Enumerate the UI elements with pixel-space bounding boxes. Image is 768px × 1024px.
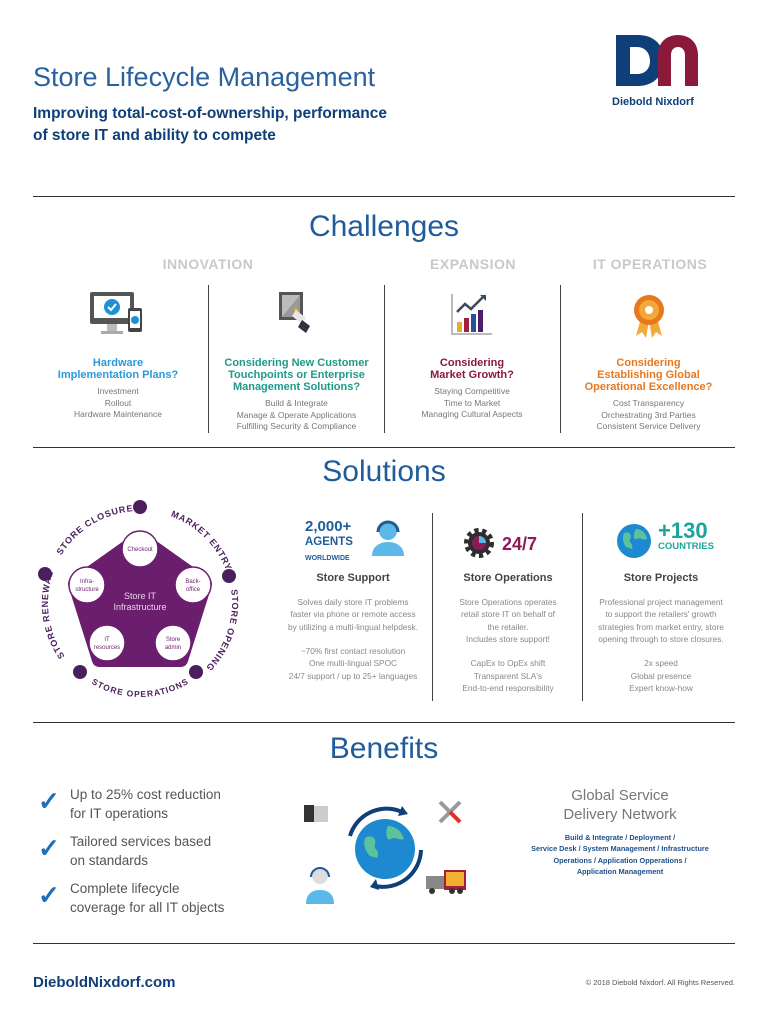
service network illustration bbox=[304, 800, 466, 904]
subtitle bbox=[33, 105, 387, 144]
category labels bbox=[163, 256, 707, 272]
benefits list: Tailored services based bbox=[70, 834, 211, 849]
challenge: market growth: Staying Competitive bbox=[434, 386, 510, 396]
challenge: market growth: Considering bbox=[440, 357, 504, 369]
lifecycle diagram: resources bbox=[94, 645, 120, 651]
challenge: touchpoints: Build & Integrate bbox=[265, 398, 328, 408]
icon: globe +130 bbox=[617, 518, 714, 558]
challenge: market growth: Managing Cultural Aspects bbox=[421, 409, 523, 419]
challenge: hardware: Rollout bbox=[105, 398, 131, 408]
logo: Diebold Nixdorf bbox=[612, 96, 694, 108]
title: Store Lifecycle Management bbox=[33, 62, 375, 92]
global service delivery network text: Delivery Network bbox=[563, 806, 677, 823]
lifecycle diagram: Store IT bbox=[124, 591, 157, 601]
icon: touch screen bbox=[279, 292, 310, 333]
solution: store operations: Store Operations operates bbox=[459, 597, 557, 607]
challenge: operational excellence: Establishing Global bbox=[597, 369, 700, 381]
benefits list: Up to 25% cost reduction bbox=[70, 787, 221, 802]
solution: store operations: Store Operations bbox=[463, 572, 553, 584]
challenge: hardware: Investment bbox=[97, 386, 139, 396]
icon: globe +130: +130 bbox=[658, 518, 708, 543]
solution: store projects: Store Projects bbox=[624, 572, 698, 584]
challenge: touchpoints: Management Solutions? bbox=[233, 381, 360, 393]
icon: agents bbox=[305, 518, 404, 562]
challenge: touchpoints: Touchpoints or Enterprise bbox=[228, 369, 365, 381]
heading: challenges: Challenges bbox=[309, 210, 459, 243]
solution: store operations: End-to-end responsibility bbox=[462, 683, 554, 693]
lifecycle diagram: STORE OPERATIONS bbox=[92, 679, 188, 697]
solution: store projects: Expert know-how bbox=[629, 683, 693, 693]
solution: store projects: 2x speed bbox=[644, 658, 678, 668]
challenge: touchpoints: Manage & Operate Applications bbox=[237, 410, 356, 420]
challenge: hardware: Hardware bbox=[93, 357, 143, 369]
solution: store support: by utilizing a multi-lingual helpdesk. bbox=[288, 622, 418, 632]
benefits list: ✓ bbox=[38, 833, 60, 863]
global service delivery network text: Application Management bbox=[577, 867, 663, 876]
lifecycle diagram: MARKET ENTRY bbox=[171, 510, 232, 568]
lifecycle diagram: Infra- bbox=[80, 579, 94, 585]
solution: store support: Store Support bbox=[316, 572, 390, 584]
solution: store operations bbox=[459, 528, 557, 693]
solution: store projects bbox=[598, 518, 724, 693]
lifecycle diagram: admin bbox=[165, 645, 181, 651]
icon: gear 24/7 bbox=[464, 528, 537, 558]
lifecycle diagram: STORE CLOSURE bbox=[56, 505, 132, 554]
lifecycle diagram: Infrastructure bbox=[113, 602, 167, 612]
challenge: hardware bbox=[58, 292, 178, 419]
challenge: hardware: Implementation Plans? bbox=[58, 369, 178, 381]
benefits list: ✓ bbox=[38, 880, 60, 910]
lifecycle diagram: office bbox=[186, 587, 201, 593]
solution: store projects: opening through to store closures. bbox=[598, 634, 724, 644]
icon: globe +130: COUNTRIES bbox=[658, 541, 714, 552]
benefits list bbox=[38, 786, 224, 915]
solution: store operations: the retailer. bbox=[487, 622, 529, 632]
lifecycle diagram: Back- bbox=[185, 579, 201, 585]
solution: store projects: strategies from market entry, store bbox=[598, 622, 724, 632]
challenge: touchpoints: Fulfilling Security & Compliance bbox=[237, 421, 356, 431]
global service delivery network text bbox=[531, 787, 709, 876]
subtitle: Improving total-cost-of-ownership, performance bbox=[33, 105, 387, 122]
challenge: market growth: Time to Market bbox=[444, 398, 500, 408]
solution: store operations: Includes store support! bbox=[466, 634, 550, 644]
lifecycle diagram bbox=[38, 500, 238, 697]
solution: store support bbox=[288, 518, 418, 681]
global service delivery network text: Service Desk / System Management / Infrastructure bbox=[531, 844, 709, 853]
solution: store operations: Transparent SLA's bbox=[474, 671, 542, 681]
challenge: touchpoints bbox=[224, 292, 369, 431]
icon: agents: 2,000+ bbox=[305, 518, 351, 535]
benefits list: on standards bbox=[70, 853, 148, 868]
lifecycle diagram: structure bbox=[75, 587, 99, 593]
solution: store support: One multi-lingual SPOC bbox=[309, 658, 397, 668]
benefits list: Complete lifecycle bbox=[70, 881, 180, 896]
icon: chart bbox=[451, 294, 492, 335]
category labels: IT OPERATIONS bbox=[593, 256, 707, 272]
solution: store support: faster via phone or remote access bbox=[290, 609, 415, 619]
solution: store operations: retail store IT on behalf of bbox=[461, 609, 555, 619]
icon: award bbox=[634, 295, 664, 338]
benefits list: ✓ bbox=[38, 786, 60, 816]
solution: store projects: Professional project management bbox=[599, 597, 723, 607]
benefits list: coverage for all IT objects bbox=[70, 900, 224, 915]
challenge: touchpoints: Considering New Customer bbox=[224, 357, 369, 369]
footer: copyright: © 2018 Diebold Nixdorf. All Rights Reserved. bbox=[586, 978, 735, 987]
lifecycle diagram: Store bbox=[166, 637, 181, 643]
solution: store projects: Global presence bbox=[631, 671, 691, 681]
logo bbox=[612, 35, 698, 108]
challenge: operational excellence: Operational Excellence? bbox=[585, 381, 712, 393]
global service delivery network text: Operations / Application Opperations / bbox=[553, 856, 687, 865]
subtitle: of store IT and ability to compete bbox=[33, 127, 276, 144]
heading: benefits: Benefits bbox=[330, 732, 438, 765]
challenge: operational excellence: Orchestrating 3rd Parties bbox=[601, 410, 696, 420]
lifecycle diagram: IT bbox=[104, 637, 110, 643]
lifecycle diagram: Checkout bbox=[127, 547, 153, 553]
challenge: market growth: Market Growth? bbox=[430, 369, 514, 381]
global service delivery network text: Global Service bbox=[571, 787, 669, 804]
challenge: operational excellence: Considering bbox=[616, 357, 681, 369]
lifecycle diagram: STORE OPENING bbox=[207, 590, 238, 670]
benefits list: for IT operations bbox=[70, 806, 168, 821]
icon: monitor bbox=[90, 292, 142, 334]
icon: gear 24/7: 24/7 bbox=[502, 534, 537, 554]
footer: website: DieboldNixdorf.com bbox=[33, 974, 176, 991]
heading: solutions: Solutions bbox=[322, 455, 446, 488]
solution: store support: ~70% first contact resolution bbox=[301, 646, 405, 656]
icon: agents: AGENTS bbox=[305, 536, 353, 548]
category labels: INNOVATION bbox=[163, 256, 253, 272]
lifecycle diagram: STORE RENEWAL bbox=[42, 572, 64, 659]
challenge: operational excellence bbox=[585, 295, 712, 431]
solution: store operations: CapEx to OpEx shift bbox=[471, 658, 545, 668]
solution: store support: Solves daily store IT problems bbox=[298, 597, 408, 607]
icon: agents: WORLDWIDE bbox=[305, 555, 350, 562]
challenge: market growth bbox=[421, 294, 523, 419]
solution: store support: 24/7 support / up to 25+ languages bbox=[289, 671, 417, 681]
category labels: EXPANSION bbox=[430, 256, 516, 272]
challenge: operational excellence: Cost Transparency bbox=[613, 398, 684, 408]
challenge: hardware: Hardware Maintenance bbox=[74, 409, 162, 419]
global service delivery network text: Build & Integrate / Deployment / bbox=[565, 833, 675, 842]
challenge: operational excellence: Consistent Service Delivery bbox=[597, 421, 700, 431]
solution: store projects: to support the retailers' growth bbox=[605, 609, 717, 619]
